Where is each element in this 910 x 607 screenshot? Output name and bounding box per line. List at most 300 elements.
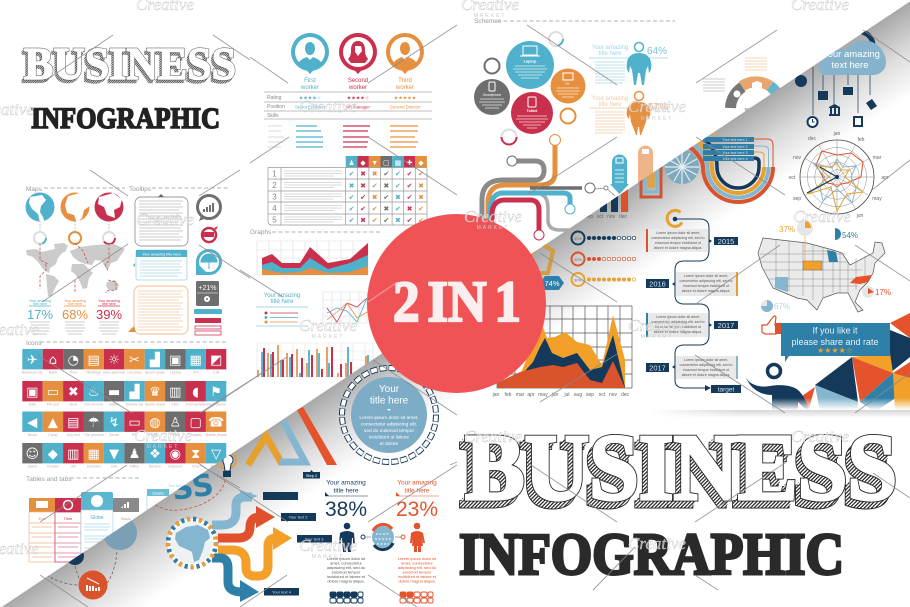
icon row two: Safe xyxy=(29,402,36,406)
year labels: 2015 xyxy=(718,237,734,246)
watermark: Creative Market marks: Creative xyxy=(134,426,192,445)
table: feature check grid: ✖ xyxy=(360,218,366,224)
bar chart fragment: sep xyxy=(585,214,593,220)
icon row four: ◆ xyxy=(48,447,58,462)
table: feature check grid: ✖ xyxy=(372,171,378,178)
watermark: Creative Market marks: Creative xyxy=(628,534,686,553)
text block: 2015: consectetur adipiscing elit, sed to xyxy=(652,236,704,240)
table: worker comparison: Senior Engineer xyxy=(295,104,326,110)
icon row three: News xyxy=(28,433,37,437)
icon row four: ❖ xyxy=(149,447,161,462)
radar chart: mar xyxy=(873,155,882,161)
radar chart: sep xyxy=(793,196,801,202)
scheme bubble: laptop xyxy=(506,41,554,89)
watermark: Creative Market marks: MARKET xyxy=(477,225,509,231)
icon row two: Wallet xyxy=(109,402,119,406)
stat: 23 percent xyxy=(396,480,439,584)
table: feature check grid: ✖ xyxy=(360,183,366,190)
timeline labels xyxy=(703,137,754,161)
stat: 68 percent: 68% xyxy=(62,307,88,322)
table: feature check grid: ✖ xyxy=(349,183,355,190)
small bar axis labels: nov xyxy=(756,107,765,113)
watermark: Creative Market marks: MARKET xyxy=(474,13,506,19)
icon row three: PC xyxy=(132,433,137,437)
radar chart: dec xyxy=(808,136,817,142)
title: small BUSINESS INFOGRAPHIC: BUSINESS xyxy=(22,41,234,92)
year labels: 2017 xyxy=(718,321,734,330)
icon row one: ◔ xyxy=(68,353,79,368)
icon row two xyxy=(22,381,226,406)
table column: crimson xyxy=(55,498,81,562)
icon: light bulb xyxy=(218,451,236,477)
title: small BUSINESS INFOGRAPHIC: INFOGRAPHIC xyxy=(31,102,220,135)
table: feature check grid: ✖ xyxy=(360,171,366,178)
icon row four: ▽ xyxy=(211,447,221,462)
icon: gray chart bubble xyxy=(198,196,220,221)
worker: first: worker xyxy=(300,85,319,91)
icon row four: Time xyxy=(192,464,200,468)
icon row three: ▭ xyxy=(128,416,141,430)
icon row one: ▣ xyxy=(169,353,181,368)
stat: 23 percent: Lorem ipsum dolor sit xyxy=(398,556,437,561)
icon row two: ♛ xyxy=(149,385,161,400)
icon row four: Cart xyxy=(111,464,117,468)
radar chart: may xyxy=(872,196,882,202)
stat: 23 percent: dolore magna aliqua. xyxy=(398,578,436,584)
radar chart: jun xyxy=(856,213,864,219)
icon row one: ☼ xyxy=(108,353,120,368)
main area chart: jul xyxy=(563,392,570,398)
blue half disc xyxy=(103,516,137,550)
area chart: crimson teal orange xyxy=(257,241,368,275)
icon: lattice globe xyxy=(665,150,699,184)
icon row four: ⧗ xyxy=(191,447,200,462)
badge: 2 in 1: 2 IN 1 xyxy=(393,269,521,334)
icon row one: Sports goals xyxy=(145,370,165,374)
worker: first: First xyxy=(304,78,316,84)
icon row three: Camp xyxy=(48,433,58,437)
icon row one: Call xyxy=(213,370,219,374)
text block: 2017: consectetur adipiscing elit, sed to xyxy=(652,320,704,324)
table: feature check grid: ♟ xyxy=(348,159,355,167)
world map xyxy=(26,243,125,297)
panel: workers xyxy=(264,33,432,225)
icon row four: ▼ xyxy=(109,447,119,462)
table: feature check grid: ✔ xyxy=(372,183,378,190)
scheme bubble: TV: TV xyxy=(565,82,570,86)
table: worker comparison: Skills xyxy=(267,113,279,119)
icon row one: Laptop xyxy=(170,370,181,374)
icon row two: ✖ xyxy=(68,385,79,400)
orange hexagon with text xyxy=(528,243,553,273)
device icon ring xyxy=(342,368,436,462)
half donut chart xyxy=(703,58,776,108)
teal title disc: title here xyxy=(370,396,409,406)
tooltip: orange text box xyxy=(128,286,188,334)
arrow labels: Your text 2 xyxy=(289,514,308,520)
table: feature check grid: ✔ xyxy=(360,206,366,213)
navy disc xyxy=(66,547,84,565)
cloud callout: text here xyxy=(832,60,868,71)
table: feature check grid: ✖ xyxy=(383,206,389,213)
table: worker comparison: ★★★★☆ xyxy=(347,96,370,102)
text block: 2017 second: consectetur adipiscing elit, sed to xyxy=(680,363,732,367)
icon row two: Bank claims xyxy=(206,402,226,406)
stat: 38 percent: eiusmod tempor xyxy=(332,570,361,574)
table: feature check grid: ✔ xyxy=(360,194,366,202)
title: large BUSINESS INFOGRAPHIC: BUSINESS xyxy=(465,416,897,520)
tooltip: ribbon labels xyxy=(194,309,222,335)
arrow: blue xyxy=(212,558,259,602)
radar chart: apr xyxy=(881,175,889,181)
map stat: 67 percent: 67% xyxy=(774,302,790,311)
icon row two: Pill cost xyxy=(47,402,59,406)
table: worker comparison: Rating xyxy=(267,95,282,101)
small bar axis labels xyxy=(745,107,776,113)
US map with stats xyxy=(758,220,891,312)
worker: second: Second xyxy=(348,78,368,84)
table: feature check grid: ✔ xyxy=(395,183,401,190)
table: feature check grid: ✔ xyxy=(349,194,355,202)
panel: schemes xyxy=(474,18,776,240)
stat: 57 percent person: 57% xyxy=(648,102,668,113)
table: feature check grid: ✚ xyxy=(407,159,413,167)
stat: 68 percent xyxy=(62,299,88,334)
table: feature check grid: 4 xyxy=(272,204,277,213)
stat: 38 percent xyxy=(325,480,368,584)
text block: your amazing title: title here xyxy=(270,299,294,305)
cloud callout xyxy=(818,40,886,75)
icon row two: Decline list xyxy=(126,402,143,406)
table: feature check grid: ✔ xyxy=(349,206,355,213)
icon row four: Office xyxy=(130,464,139,468)
table: feature check grid: ✖ xyxy=(372,194,378,202)
text block: your amazing title xyxy=(256,293,308,326)
main area chart: nov xyxy=(609,392,618,398)
map stat: 17 percent: 17% xyxy=(875,288,891,297)
icon row three: ☂ xyxy=(88,416,100,430)
stat: 23 percent: incididunt ut labore et xyxy=(398,574,437,579)
icon row two: Files xyxy=(172,402,179,406)
tag: teal arrow xyxy=(610,154,629,194)
icon row one: CPI xyxy=(193,370,199,374)
icon row four xyxy=(22,443,226,468)
stat: 23 percent: 23% xyxy=(396,498,438,521)
teal title disc: Your xyxy=(379,384,400,395)
icon: orange globe xyxy=(60,192,90,223)
hanging icons xyxy=(795,75,877,127)
icon row one: ▦ xyxy=(190,353,202,368)
icon row four: ▦ xyxy=(88,447,100,462)
progress row: 60 percent: 60% xyxy=(574,236,582,241)
teal title disc: sed do euismod tempor xyxy=(364,428,414,434)
stat: 64 percent person: Your amazing xyxy=(592,45,628,51)
icon row two: Sports result xyxy=(145,402,165,406)
watermark: Creative Market marks: Creative xyxy=(136,210,194,229)
icon row three: ▲ xyxy=(48,416,58,430)
icon row three: The pension xyxy=(84,433,104,437)
arrow: light blue xyxy=(212,490,258,525)
timeline labels: Your text here 1 xyxy=(722,138,748,142)
icon row four: Rocket xyxy=(47,464,58,468)
panel: tables and tabs xyxy=(26,476,187,562)
icon row four: Discount xyxy=(168,464,182,468)
icon: declining bars xyxy=(78,570,108,600)
icon row four: ▥ xyxy=(67,447,79,462)
text block: 2015: labore et dolore magna aliqua. xyxy=(654,246,702,250)
table: feature check grid: ✖ xyxy=(407,206,413,213)
small bar axis labels: oct xyxy=(745,107,752,113)
title: large BUSINESS INFOGRAPHIC: BUSINESS xyxy=(465,416,897,520)
table: feature check grid: ▼ xyxy=(371,160,378,167)
icon row one: Time xyxy=(69,370,77,374)
table column: orange xyxy=(29,498,55,562)
speech box: ★★★★☆ xyxy=(817,346,853,355)
stat: 38 percent: Lorem ipsum dolor sit xyxy=(327,556,366,561)
stat: 38 percent: 38% xyxy=(325,498,367,521)
scheme bubble: laptop: Laptop xyxy=(524,60,537,64)
teal title disc: consectetur adipiscing elit, xyxy=(361,422,417,428)
worker: second xyxy=(339,33,377,91)
timeline path xyxy=(675,219,709,388)
timeline labels: Your text here 2 xyxy=(722,145,748,149)
cloud with hanging icons xyxy=(795,32,886,127)
radar chart: jan xyxy=(833,131,841,137)
progress row: 30 percent: 30% xyxy=(574,257,582,262)
icon: thumbs up xyxy=(762,316,781,334)
globe arrows xyxy=(168,490,332,602)
step tabs xyxy=(641,164,661,197)
stat: 39 percent: 39% xyxy=(96,307,122,322)
icon row two: ▥ xyxy=(169,385,181,400)
icon row one: ✂ xyxy=(129,353,140,368)
text block: 2017 second xyxy=(676,356,738,379)
table: feature check grid: ✔ xyxy=(372,206,378,213)
watermark: Creative Market marks: MARKET xyxy=(312,334,344,340)
text block: 2016: eiusmod tempor incididunt ut xyxy=(683,284,729,288)
timeline labels: Your text here 3 xyxy=(722,151,748,155)
worker: first xyxy=(291,33,329,91)
heading: graphs: Graphs xyxy=(250,229,272,236)
stat: 38 percent: adipiscing elit, sed do xyxy=(327,565,366,570)
icon row three: ◍ xyxy=(149,416,161,430)
stat: 23 percent: eiusmod tempor xyxy=(403,570,432,574)
stat: 68 percent: Your amazing xyxy=(64,299,86,303)
table: feature check grid: ✔ xyxy=(349,171,355,178)
scheme bubble: tablet: Tablet xyxy=(527,109,538,113)
title: small BUSINESS INFOGRAPHIC: BUSINESS xyxy=(24,38,236,89)
text block: 2017 second: eiusmod tempor incididunt ut xyxy=(683,368,729,372)
watermark: Creative Market marks: Creative xyxy=(299,97,357,116)
letters: step heading fragment: SS xyxy=(170,468,216,508)
tabs panel: Details xyxy=(152,492,164,496)
icon row four: Basket xyxy=(211,464,222,468)
icon row three: ▢ xyxy=(190,416,202,430)
icon row two: ▬ xyxy=(108,385,120,400)
icon row two: ♨ xyxy=(88,385,100,400)
icon row four: Gift xyxy=(71,464,76,468)
table: feature check grid: ✔ xyxy=(349,218,355,224)
label: step 2: Step 2 xyxy=(306,473,318,478)
stat: 38 percent: amet, consectetur xyxy=(330,560,363,566)
pictogram squares: navy xyxy=(330,592,363,603)
icon row three: ♙ xyxy=(169,416,181,430)
table: feature check grid: ✔ xyxy=(418,171,424,178)
arrow labels xyxy=(263,492,332,596)
badge: 2 in 1 xyxy=(367,214,546,393)
watermark: Creative Market marks: Creative xyxy=(791,427,849,446)
panel: graphs xyxy=(250,229,380,377)
icon: crimson globe xyxy=(94,192,124,222)
stat: 64 percent person: title here xyxy=(598,51,622,57)
stat: 39 percent: title here xyxy=(102,302,116,306)
main area chart: oct xyxy=(599,392,606,398)
icon row one: Idea approval xyxy=(103,370,125,374)
arrow: orange xyxy=(218,527,292,576)
stat: 64 percent person xyxy=(589,42,668,85)
heading: tables and tabs: Tables and tabs xyxy=(26,476,72,483)
pictogram squares: red xyxy=(400,592,433,603)
bar chart fragment: dec xyxy=(619,214,628,220)
mosaic triangles xyxy=(746,313,910,410)
main area chart: feb xyxy=(505,392,512,398)
bar chart fragment xyxy=(585,188,628,220)
icon row two: ⚑ xyxy=(210,385,222,400)
circular chart badge xyxy=(42,516,137,600)
table: feature check grid: ✔ xyxy=(383,194,389,202)
text block: 2016: consectetur adipiscing elit, sed to xyxy=(680,279,732,283)
heading: maps: Maps xyxy=(26,186,43,193)
watermark: Creative Market marks: MARKET xyxy=(641,116,673,122)
table column: teal highlighted xyxy=(81,492,113,560)
panel: icons xyxy=(22,340,228,468)
title: large BUSINESS INFOGRAPHIC: BUSINESS xyxy=(460,423,892,527)
map connectors xyxy=(40,243,116,293)
table: feature check grid: ✔ xyxy=(395,171,401,178)
table: feature check grid: ✖ xyxy=(418,194,424,202)
table column: gray xyxy=(113,498,139,521)
stat: 39 percent xyxy=(96,299,122,334)
watermark: Creative Market marks: Creative xyxy=(793,207,851,226)
watermark: Creative Market marks: Creative xyxy=(464,427,522,446)
table: feature check grid: ✔ xyxy=(407,218,413,224)
tag: orange arrow xyxy=(638,146,653,183)
dashed links xyxy=(42,552,117,586)
table: feature check grid: ✔ xyxy=(418,218,424,224)
scheme bubble: TV xyxy=(550,68,586,104)
watermark: Creative Market marks: Creative xyxy=(628,316,686,335)
icon row two: ◖ xyxy=(192,385,199,400)
table: feature check grid: ✔ xyxy=(407,194,413,202)
icon row three: Mobile phone xyxy=(205,433,227,437)
icon row four: ☺ xyxy=(26,447,39,462)
icon row four: Decision xyxy=(87,464,101,468)
text block: 2015 xyxy=(646,229,708,252)
table: feature check grid: 2 xyxy=(272,181,277,190)
stat: 23 percent: Your amazing xyxy=(397,480,437,486)
text block: 2016: labore et dolore magna aliqua. xyxy=(682,289,730,293)
scheme bubble: smartphone xyxy=(474,79,510,115)
text block: 2017: Lorem ipsum dolor sit amet, xyxy=(656,315,700,319)
icon row two: ▭ xyxy=(47,385,59,400)
table: feature check grid: ✔ xyxy=(395,206,401,213)
table: feature check grid: ✔ xyxy=(407,171,413,178)
arrow: red xyxy=(218,506,275,538)
radar chart: oct xyxy=(789,175,796,181)
stat: 57 percent person: Your amazing xyxy=(592,96,628,102)
table: feature check grid: 1 xyxy=(272,170,277,178)
teal title disc: incididunt ut labore xyxy=(369,434,409,440)
stat: 38 percent: dolore magna aliqua. xyxy=(327,578,365,584)
progress dots xyxy=(528,232,636,290)
worker: third xyxy=(386,33,424,91)
teal title disc: Lorem ipsum dolor sit amet, xyxy=(359,415,419,421)
year labels: 2016 xyxy=(649,280,666,288)
tabs panel xyxy=(147,484,187,525)
icon row two: ▟ xyxy=(128,383,140,400)
tooltip: gray text box xyxy=(135,194,188,246)
table: feature check grid: ✖ xyxy=(395,218,401,224)
cloud callout: Your amazing xyxy=(822,49,880,60)
main area chart: jun xyxy=(551,392,559,398)
shadow under upper sheet xyxy=(650,410,910,418)
table: feature check grid: ◆ xyxy=(418,160,424,167)
table: feature check grid: ✖ xyxy=(383,183,389,190)
main area chart: apr xyxy=(527,392,535,398)
stat: 17 percent: Your amazing xyxy=(29,299,51,303)
table column: crimson: Time xyxy=(64,516,73,521)
rate callout xyxy=(746,313,910,410)
icon row one: ⌂ xyxy=(49,353,57,368)
year labels xyxy=(646,237,741,394)
table: worker comparison: ★★★★★ xyxy=(394,96,417,102)
hexagon: 74 percent: 74% xyxy=(544,279,560,288)
icon row three: ☎ xyxy=(208,416,224,430)
text block: 2017: labore et dolore magna aliqua. xyxy=(654,330,702,334)
stat: 17 percent: title here xyxy=(33,302,47,306)
stat: 23 percent: adipiscing elit, sed do xyxy=(398,565,437,570)
title: large BUSINESS INFOGRAPHIC: BUSINESS xyxy=(460,423,892,527)
bar chart fragment: oct xyxy=(597,214,604,220)
watermark: Creative Market marks: Creative xyxy=(628,97,686,116)
watermark: Creative Market marks: Creative xyxy=(464,207,522,226)
heading: icons: Icons xyxy=(26,340,42,347)
dashed route xyxy=(155,480,225,510)
stat: 17 percent xyxy=(27,299,53,334)
table: feature check grid: ✔ xyxy=(407,183,413,190)
table: worker comparison xyxy=(264,92,432,119)
arrow labels: Your text 4 xyxy=(272,590,292,594)
pipes diagram xyxy=(482,134,615,240)
text block: 2016 xyxy=(676,272,738,296)
worker: second: worker xyxy=(348,85,367,91)
title: large BUSINESS INFOGRAPHIC: INFOGRAPHIC xyxy=(459,521,844,587)
panel: maps xyxy=(26,186,125,334)
watermark: Creative Market marks: MARKET xyxy=(641,334,673,340)
timeline labels: Your text here 4 xyxy=(722,157,748,161)
main area chart: mar xyxy=(516,392,525,398)
tooltip: plus 21 percent box xyxy=(196,281,219,306)
tooltip: teal titled box: Your amazing title here xyxy=(142,252,181,256)
text block: your amazing title: Your amazing xyxy=(264,293,300,299)
icon row one: ▤ xyxy=(88,353,100,368)
icon row one: Meetings xyxy=(86,370,101,374)
line chart xyxy=(323,292,367,323)
label: step 2 xyxy=(303,470,320,478)
icon row one: Cut price xyxy=(127,370,142,374)
title: large BUSINESS INFOGRAPHIC: BUSINESS xyxy=(462,420,894,524)
map stat: 37 percent: 37% xyxy=(779,225,795,234)
